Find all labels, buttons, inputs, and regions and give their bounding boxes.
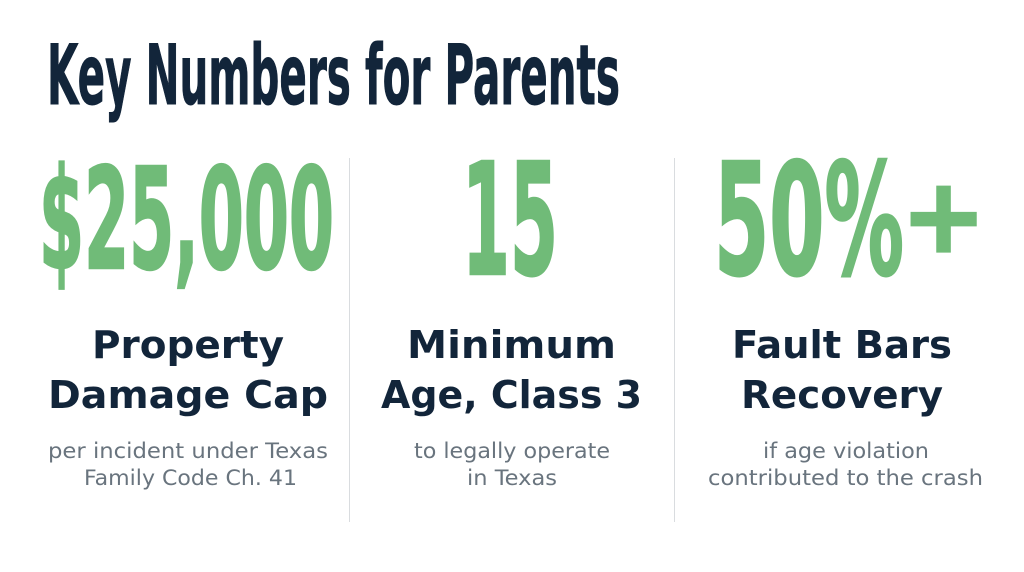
description: per incident: Family Code Ch. 41 <box>84 466 297 491</box>
panel: minimum age: 15 <box>462 130 558 311</box>
panel: minimum age <box>381 130 642 491</box>
heading: Fault Bars Recovery <box>732 323 952 417</box>
heading: Minimum Age, Class 3: Minimum <box>407 323 616 367</box>
big number: 50%+: + <box>905 144 982 291</box>
heading: Property Damage Cap: Damage Cap <box>48 373 328 417</box>
heading: Fault Bars Recovery: Recovery <box>741 373 943 417</box>
heading: Property Damage Cap <box>48 323 328 417</box>
heading: Minimum Age, Class 3 <box>381 323 642 417</box>
description: if age violation: if age violation <box>763 439 929 464</box>
heading: Property Damage Cap: Property <box>92 323 284 367</box>
description: per incident: per incident under Texas <box>48 439 328 464</box>
description: to legally operate: to legally operate <box>414 439 610 464</box>
text: $25,000 <box>39 139 334 302</box>
description: to legally operate <box>414 439 610 491</box>
description: to legally operate: in Texas <box>467 466 557 491</box>
description: if age violation <box>708 439 983 491</box>
panel: fault bars recovery <box>708 130 983 491</box>
description: per incident <box>48 439 328 491</box>
heading: Fault Bars Recovery: Fault Bars <box>732 323 952 367</box>
description: if age violation: contributed to the crash <box>708 466 983 491</box>
heading: Minimum Age, Class 3: Age, Class 3 <box>381 373 642 417</box>
panel: property damage cap <box>39 139 334 491</box>
